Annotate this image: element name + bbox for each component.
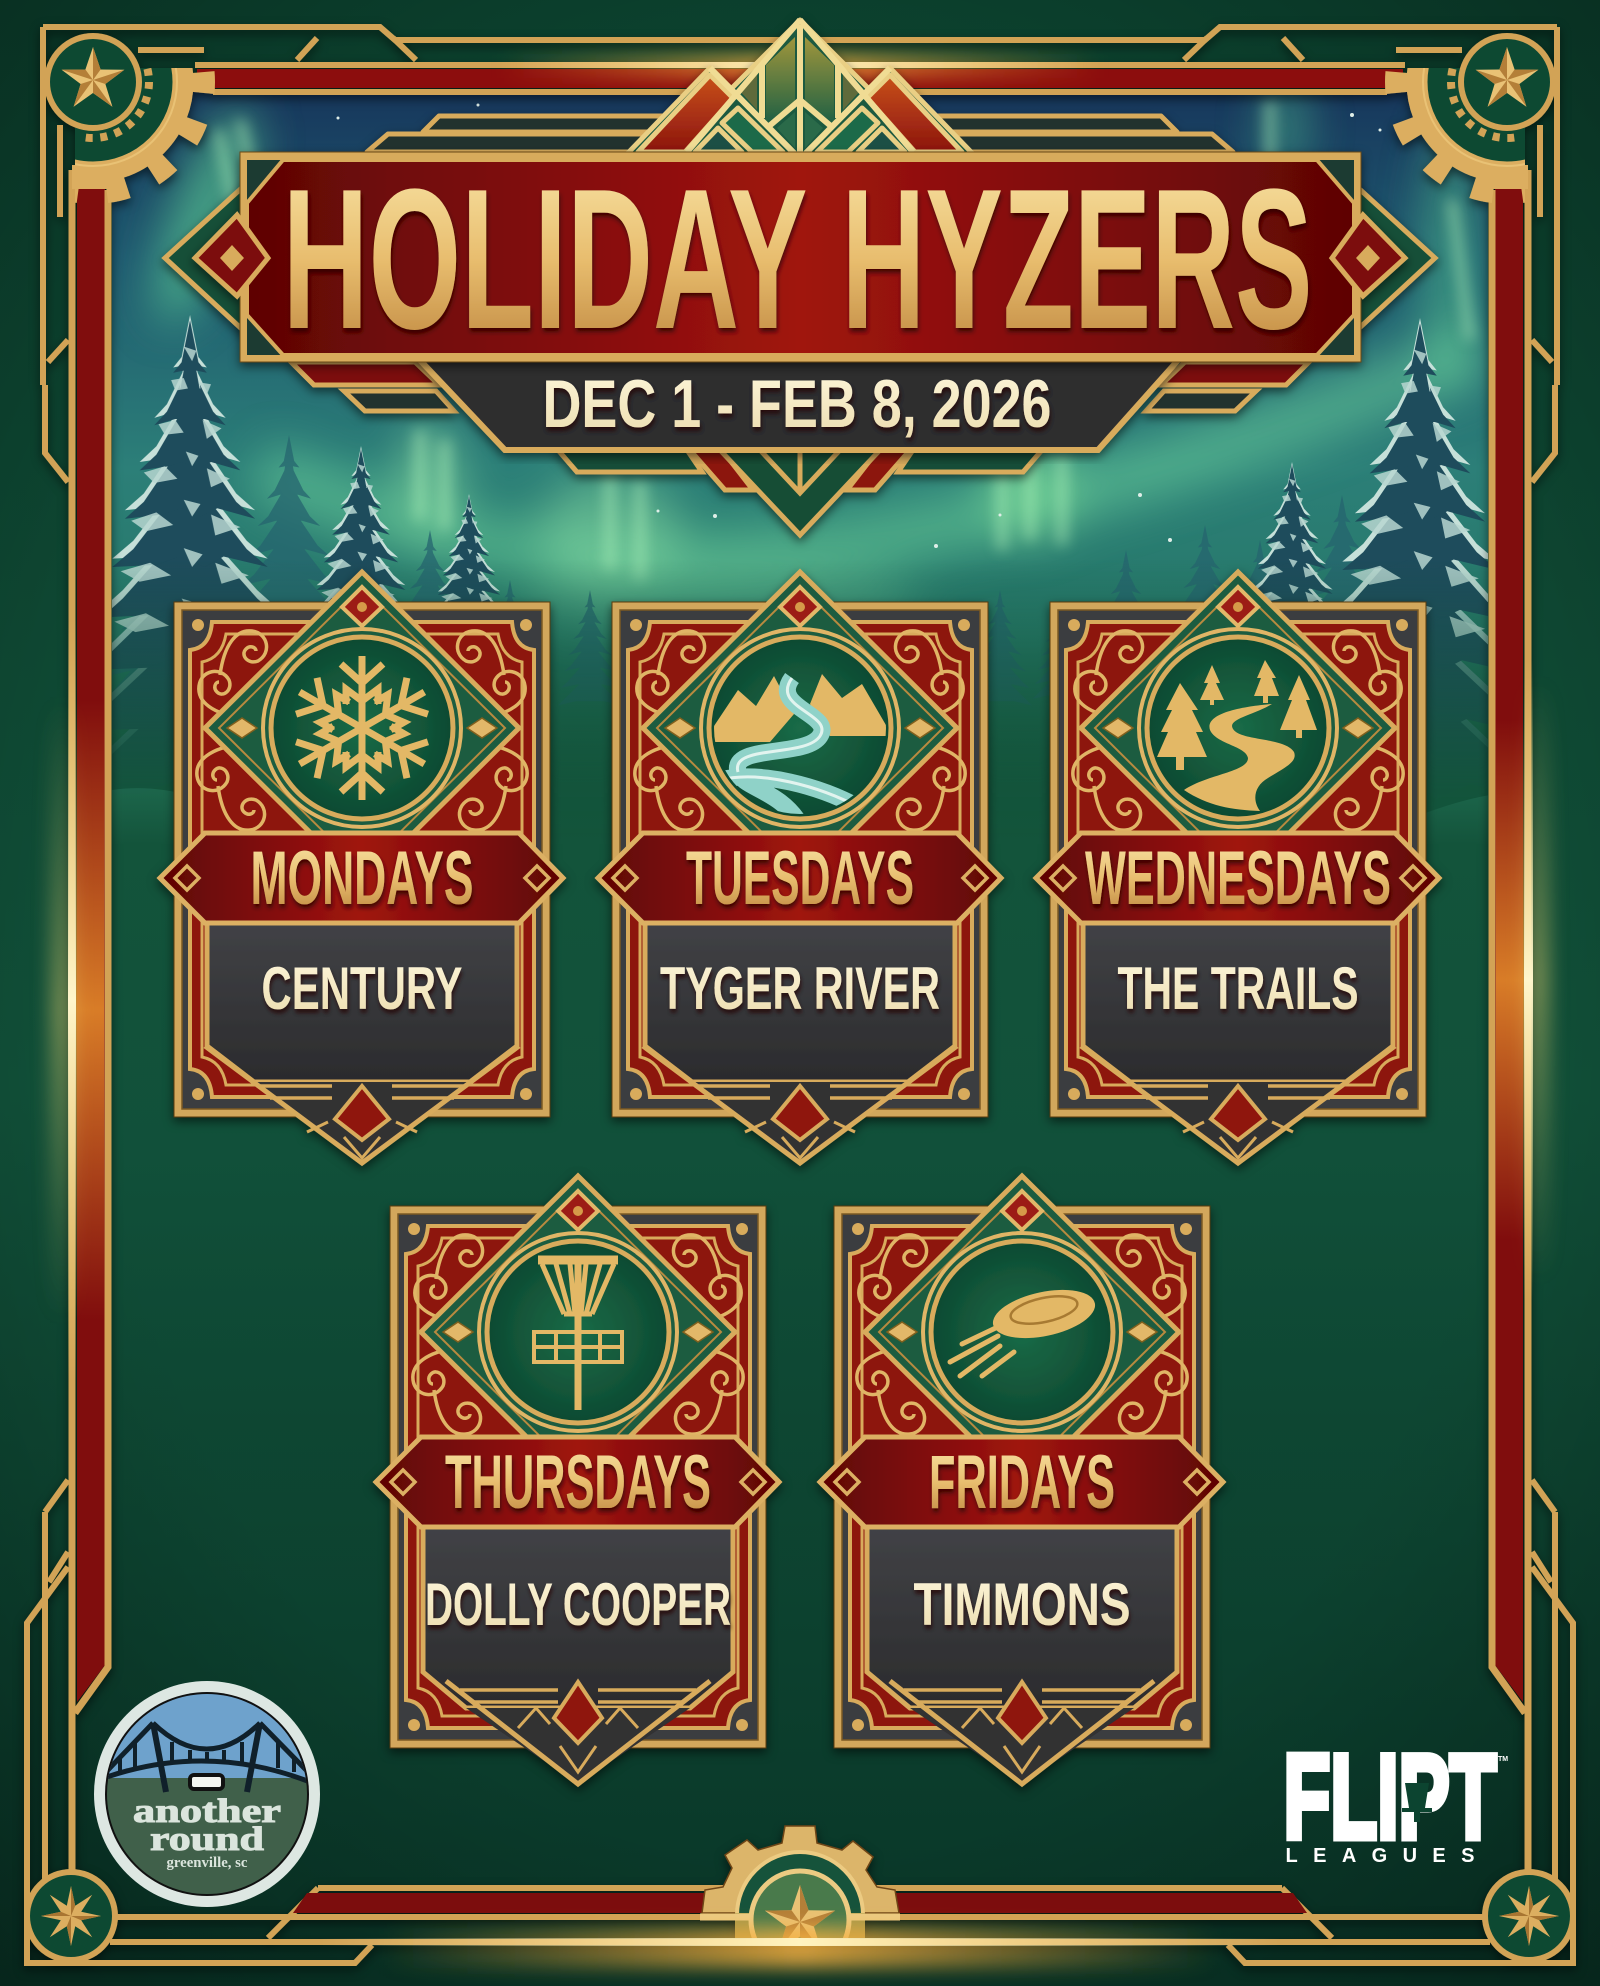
aurora glow <box>134 75 1480 640</box>
top peak ornament <box>367 20 1233 154</box>
logo wordmark: another <box>133 1793 281 1830</box>
logo wordmark: greenville, sc <box>166 1855 248 1871</box>
frame left half <box>27 27 800 1963</box>
day label: FRIDAYS <box>929 1440 1115 1525</box>
logo: FLIPT Leagues <box>1284 1730 1508 1867</box>
bottom point ornament <box>291 362 1309 535</box>
title banner group <box>165 20 1435 535</box>
snowy fir trees <box>112 315 1488 754</box>
course name: TYGER RIVER <box>660 955 940 1022</box>
day label: MONDAYS <box>250 836 474 921</box>
icon: snowflake <box>289 656 435 800</box>
icon: flying disc <box>950 1282 1099 1376</box>
course name: THE TRAILS <box>1118 955 1358 1022</box>
day label: THURSDAYS <box>445 1440 711 1525</box>
day label: TUESDAYS <box>686 836 914 921</box>
date: DEC 1 - FEB 8, 2026 <box>542 366 1052 442</box>
corner gear with star: top left <box>0 0 204 193</box>
title plate <box>195 148 1405 371</box>
icon: river between mountains <box>714 673 886 814</box>
card: Fridays, Timmons <box>820 1176 1223 1784</box>
title: HOLIDAY <box>282 148 808 371</box>
side chevrons <box>165 185 1435 332</box>
distant tree line <box>122 436 1366 658</box>
aurora curtains <box>218 100 1470 580</box>
card: Wednesdays, The Trails <box>1036 572 1439 1163</box>
course name: DOLLY COOPER <box>425 1571 731 1638</box>
icon: forest trail <box>1157 660 1317 811</box>
frame right half <box>800 27 1573 1963</box>
card: Thursdays, Dolly Cooper <box>376 1176 779 1784</box>
basket mark <box>1402 1783 1432 1822</box>
logo: FLIPT Leagues: TM <box>1498 1756 1508 1763</box>
corner medallion: bottom right <box>1485 1872 1573 1960</box>
logo wordmark <box>133 1793 281 1871</box>
logo wordmark: round <box>150 1821 264 1858</box>
corner medallion: bottom left <box>27 1872 115 1960</box>
card: Tuesdays, Tyger River <box>598 572 1001 1163</box>
stars <box>336 104 1382 548</box>
scenery: aurora sky and forest <box>72 75 1538 844</box>
icon: disc golf basket <box>534 1260 622 1410</box>
logo: FLIPT Leagues: LEAGUES <box>1286 1845 1474 1867</box>
corner gear with star: top right <box>1396 0 1600 193</box>
course name: CENTURY <box>262 955 462 1022</box>
logo: another round <box>94 1681 320 1907</box>
bridge <box>104 1723 310 1792</box>
date ribbon <box>418 358 1180 450</box>
course name: TIMMONS <box>913 1571 1131 1638</box>
snow hills <box>112 788 1488 817</box>
card: Mondays, Century <box>160 572 563 1163</box>
bottom centre gear <box>700 1825 900 1938</box>
